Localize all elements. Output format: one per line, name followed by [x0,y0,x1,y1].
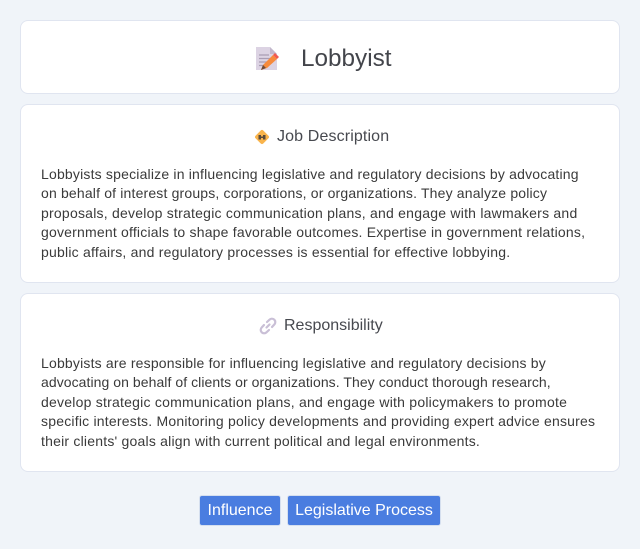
tag: influence [199,495,281,526]
text block: responsibility: Lobbyists are responsible for influencing legislative and regulatory decisions by [41,355,546,371]
text block: responsibility: develop strategic communication plans, and engage with policymakers to promote [41,394,567,410]
text block: responsibility: their clients' goals align with current political and legal environments. [41,433,480,449]
heading: job description: Job Description [277,128,389,145]
text block: job description: government officials to shape favorable outcomes. Expertise in government relations, [41,224,585,240]
title: Lobbyist [301,45,392,72]
text block: job description: proposals, develop strategic communication plans, and engage with lawmakers and [41,205,577,221]
tag: legislative process [287,495,441,526]
text block: job description: on behalf of interest groups, corporations, or organizations. They analyze policy [41,185,547,201]
text block: responsibility: advocating on behalf of clients or organizations. They conduct thorough research, [41,374,551,390]
panel: responsibility [20,293,620,472]
panel: title card [20,20,620,94]
text block: responsibility [41,355,595,449]
text block: job description: Lobbyists specialize in influencing legislative and regulatory decisions by advocating [41,166,579,182]
icon: diamond road sign [255,130,269,144]
tag: legislative process: Legislative Process [295,502,433,519]
tag: influence: Influence [208,502,272,519]
text block: job description: public affairs, and regulatory processes is essential for effective lobbying. [41,244,510,260]
text block: responsibility: specific interests. Monitoring policy developments and providing expert advice ensures [41,413,595,429]
icon: chain link [260,318,276,334]
heading: responsibility: Responsibility [284,317,383,334]
text block: job description [41,166,585,260]
icon: document with pencil [256,47,279,70]
panel: job description [20,104,620,283]
